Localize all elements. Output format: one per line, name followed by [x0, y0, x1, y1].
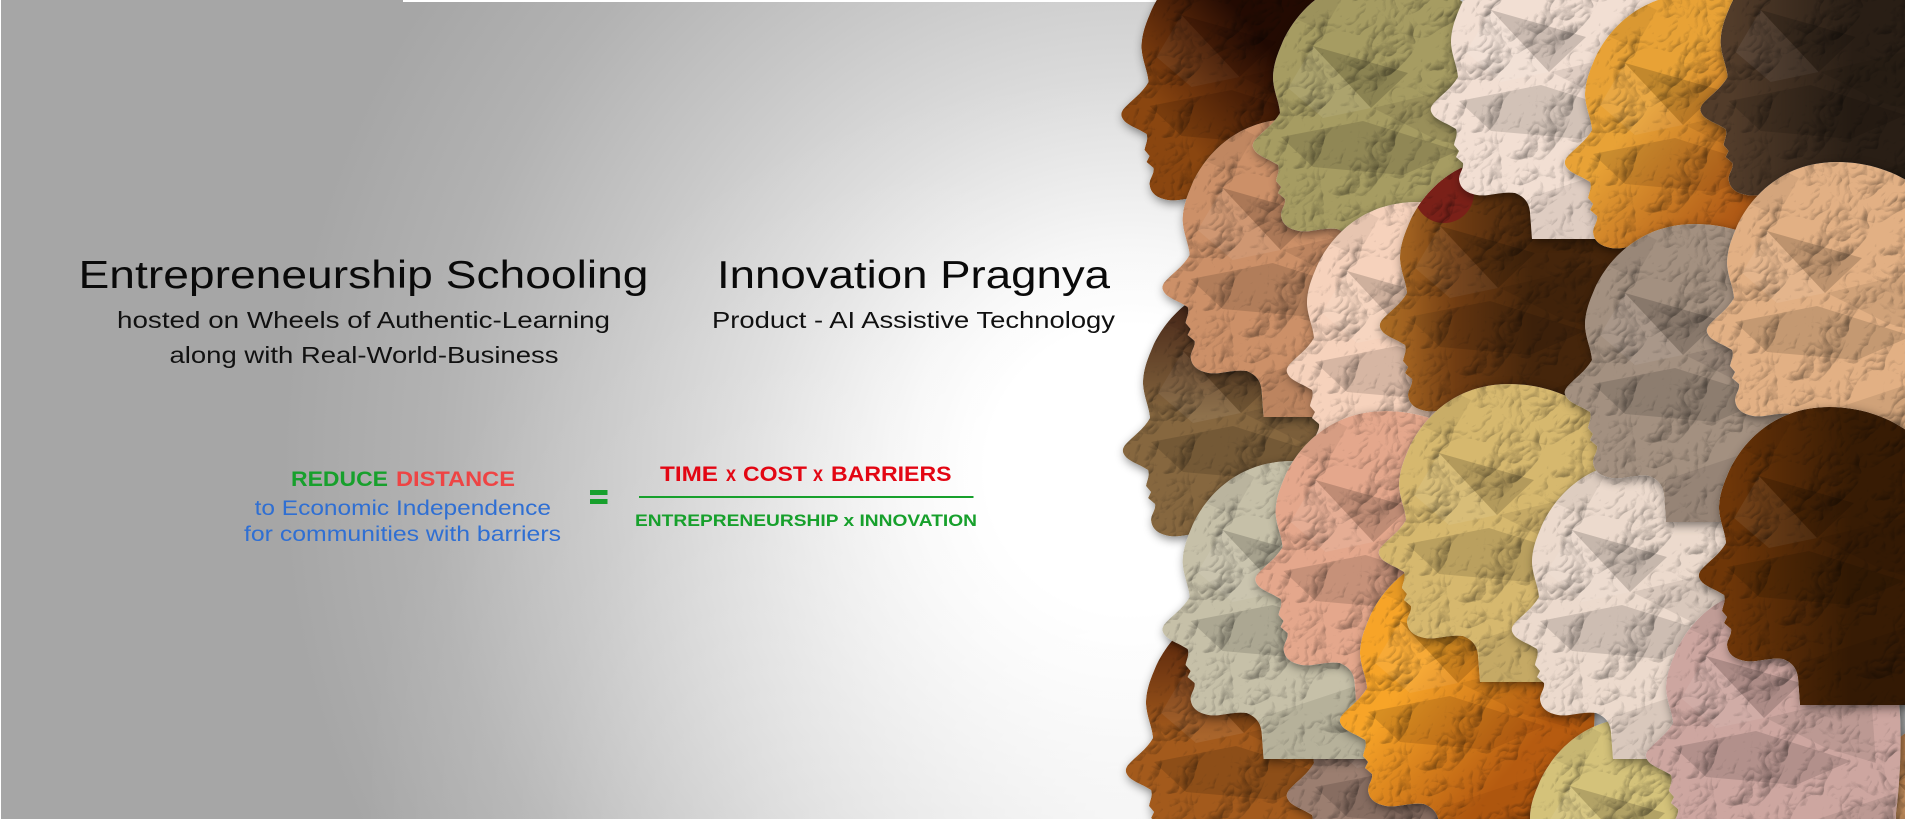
top white strip — [403, 0, 1905, 2]
text: to economic independence: to Economic Independence — [255, 496, 551, 520]
head: deep reddish brown — [1376, 165, 1627, 418]
heading: Entrepreneurship Schooling: Entrepreneurship Schooling — [78, 254, 648, 297]
text: along with real world business: along with Real-World-Business — [170, 342, 558, 368]
head: light peach — [1284, 199, 1436, 437]
numerator: time x cost x barriers — [660, 462, 952, 486]
head: brown orange bottom left — [1122, 640, 1314, 819]
head: sage — [1158, 459, 1368, 768]
head: tan right — [1704, 162, 1905, 430]
head: pale pink — [1431, 0, 1686, 242]
head: dark red brown top left — [1118, 0, 1315, 210]
numerator: time x cost x barriers: x — [813, 462, 823, 486]
head: terracotta — [1158, 120, 1342, 426]
heading: Innovation Pragnya: Innovation Pragnya — [717, 254, 1110, 297]
head: yellow white bottom — [1526, 720, 1678, 819]
text: for communities with barriers: for communities with barriers — [244, 522, 561, 546]
flat grey left area — [1, 0, 281, 819]
numerator: time x cost x barriers: BARRIERS — [831, 462, 952, 486]
head: dark brown top right — [1696, 0, 1905, 204]
head: mauve — [1646, 583, 1901, 821]
head: amber — [1561, 0, 1758, 254]
head: tan bottom right — [1896, 730, 1905, 819]
head: taupe lower — [1284, 759, 1438, 819]
equation left: distance word: DISTANCE — [396, 467, 515, 491]
text: product description: Product - AI Assistive Technology — [712, 307, 1116, 333]
equation left: reduce distance: REDUCE — [291, 467, 388, 491]
head: yellow — [1375, 383, 1598, 692]
head: olive — [1250, 0, 1464, 241]
head: bright orange — [1340, 548, 1595, 821]
head: grey taupe — [1565, 220, 1820, 525]
denominator: entrepreneurship x innovation: ENTREPRENEURSHIP x INNOVATION — [635, 512, 977, 530]
numerator: time x cost x barriers: TIME — [660, 462, 718, 486]
fraction line — [639, 496, 974, 498]
panel: paper head silhouettes — [1121, 0, 1905, 821]
head: dark chocolate — [1699, 403, 1905, 708]
bottom white strip — [0, 819, 1905, 821]
numerator: time x cost x barriers: COST — [743, 462, 807, 486]
head: pale beige — [1508, 468, 1726, 769]
text: hosted on wheels: hosted on Wheels of Authentic-Learning — [117, 307, 610, 333]
numerator: time x cost x barriers: x — [726, 462, 736, 486]
equals sign — [590, 490, 608, 504]
head: salmon — [1252, 407, 1432, 704]
head: dark taupe mid left — [1119, 304, 1320, 546]
